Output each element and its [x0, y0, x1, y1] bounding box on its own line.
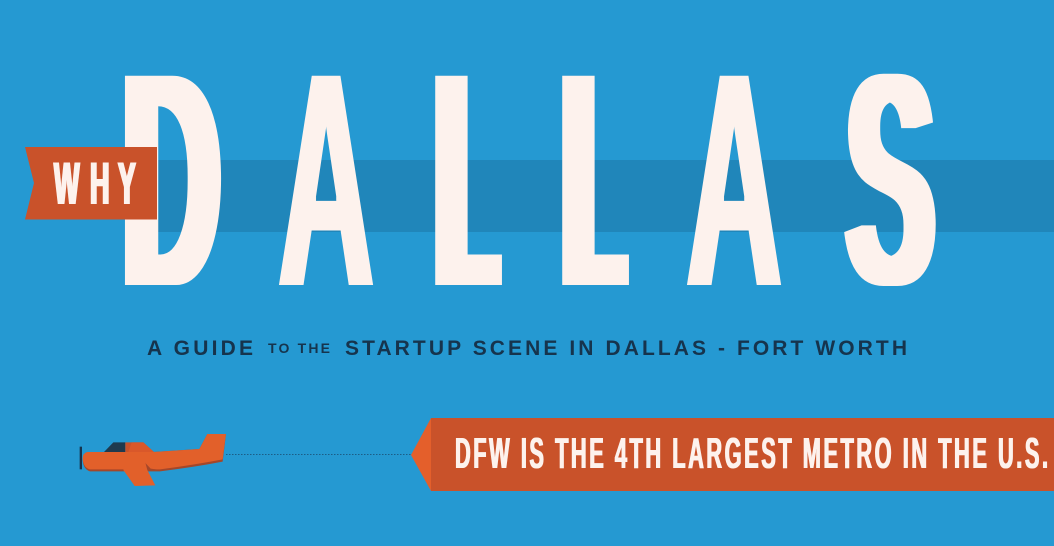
banner: DFW fact: DFW IS THE 4TH LARGEST METRO IN THE U.S.	[455, 430, 1048, 478]
subtitle: STARTUP SCENE IN DALLAS - FORT WORTH	[345, 337, 907, 360]
letter A: A	[686, 6, 782, 353]
banner: DFW fact	[411, 418, 1054, 491]
tow line	[226, 454, 411, 456]
subtitle: A GUIDE	[147, 337, 253, 360]
letter L: L	[438, 8, 495, 353]
letter S: S	[847, 9, 934, 350]
ribbon: WHY: WHY	[54, 150, 136, 217]
letter L: L	[566, 8, 622, 353]
icon: airplane	[80, 434, 226, 486]
letter D: D	[123, 7, 220, 353]
title: DALLAS	[123, 6, 934, 353]
dark horizontal band	[150, 160, 1054, 232]
ribbon: WHY	[25, 147, 157, 220]
letter A: A	[278, 6, 374, 353]
subtitle: TO THE	[268, 340, 330, 356]
